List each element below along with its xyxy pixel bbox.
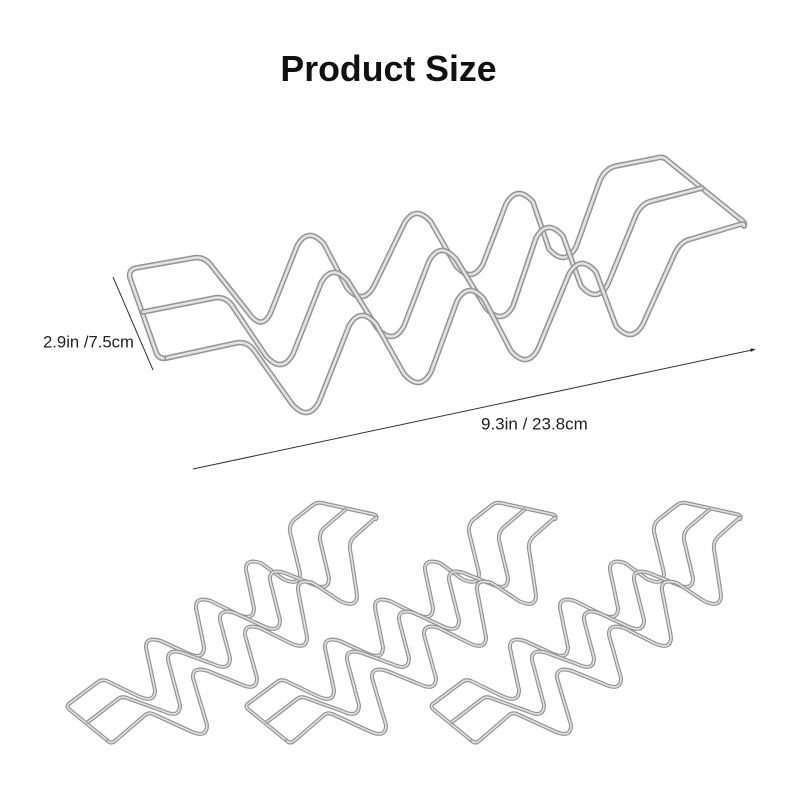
large wire taco rack bbox=[130, 157, 745, 413]
title: Product Size bbox=[280, 49, 497, 89]
small rack 3 bbox=[432, 503, 741, 742]
length dimension arrow bbox=[193, 348, 756, 469]
length label: 9.3in / 23.8cm bbox=[481, 414, 588, 434]
width label: 2.9in /7.5cm bbox=[43, 332, 134, 352]
small rack 1 bbox=[68, 503, 377, 742]
small rack 2 bbox=[246, 503, 556, 742]
width dimension line bbox=[113, 277, 153, 370]
